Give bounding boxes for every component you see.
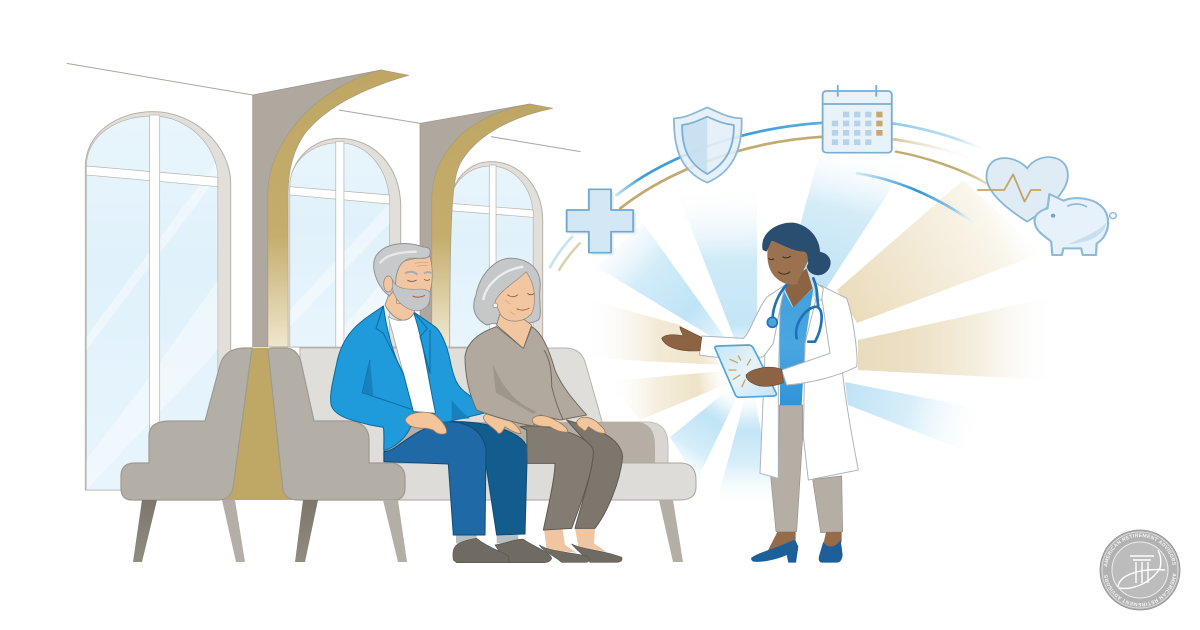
man trousers: [384, 421, 527, 535]
woman feet: [539, 528, 622, 562]
man hands: [405, 412, 521, 434]
sofa: [121, 348, 696, 562]
doctor coat: [699, 283, 858, 480]
column 1: [253, 70, 409, 347]
logo text: AMERICAN RETIREMENT ADVISORS: [1104, 534, 1176, 567]
man shoes: [453, 535, 552, 563]
doctor right hand: [746, 367, 783, 386]
column 2: [420, 104, 553, 347]
building with arched windows: [67, 63, 581, 490]
man blazer: [331, 306, 491, 451]
icon: piggy bank: [1035, 194, 1116, 255]
legs: [133, 500, 683, 562]
icon: medical cross: [567, 189, 636, 255]
arcs and benefit icons: [550, 85, 1116, 270]
doctor left hand: [662, 327, 702, 351]
window 2: [290, 138, 401, 347]
logo text lower: AMERICAN RETIREMENT ADVISORS: [1104, 573, 1176, 606]
icon: heart with pulse: [977, 157, 1068, 222]
window 1: [85, 112, 231, 490]
woman head: [474, 258, 540, 348]
doctor: [662, 223, 858, 533]
man shirt: [388, 312, 437, 417]
doctor trousers: [771, 405, 843, 533]
man head: [374, 244, 432, 320]
doctor scrubs: [779, 288, 813, 405]
right chair: [268, 348, 405, 500]
light rays: [583, 143, 1052, 508]
gold panel between chairs: [223, 348, 293, 500]
woman trousers: [520, 420, 623, 530]
sofa right arm inner: [383, 422, 655, 465]
seated woman: [465, 258, 623, 562]
icon: calendar: [823, 85, 892, 153]
logo badge: [1100, 530, 1180, 610]
woman sweater: [465, 327, 587, 426]
stethoscope: [767, 278, 822, 342]
woman hands: [532, 416, 605, 433]
doctor head: [762, 223, 831, 307]
window 3: [450, 162, 543, 347]
tablet: [715, 345, 776, 397]
seated man: [331, 244, 552, 563]
arcs: [550, 123, 986, 270]
doctor shoes and feet: [751, 532, 843, 563]
logo pillar: [1118, 550, 1165, 588]
left chair: [121, 348, 252, 500]
icon: shield: [674, 107, 742, 183]
sofa back: [300, 348, 603, 465]
sofa right arm outer: [600, 422, 668, 465]
sofa base: [300, 463, 696, 500]
